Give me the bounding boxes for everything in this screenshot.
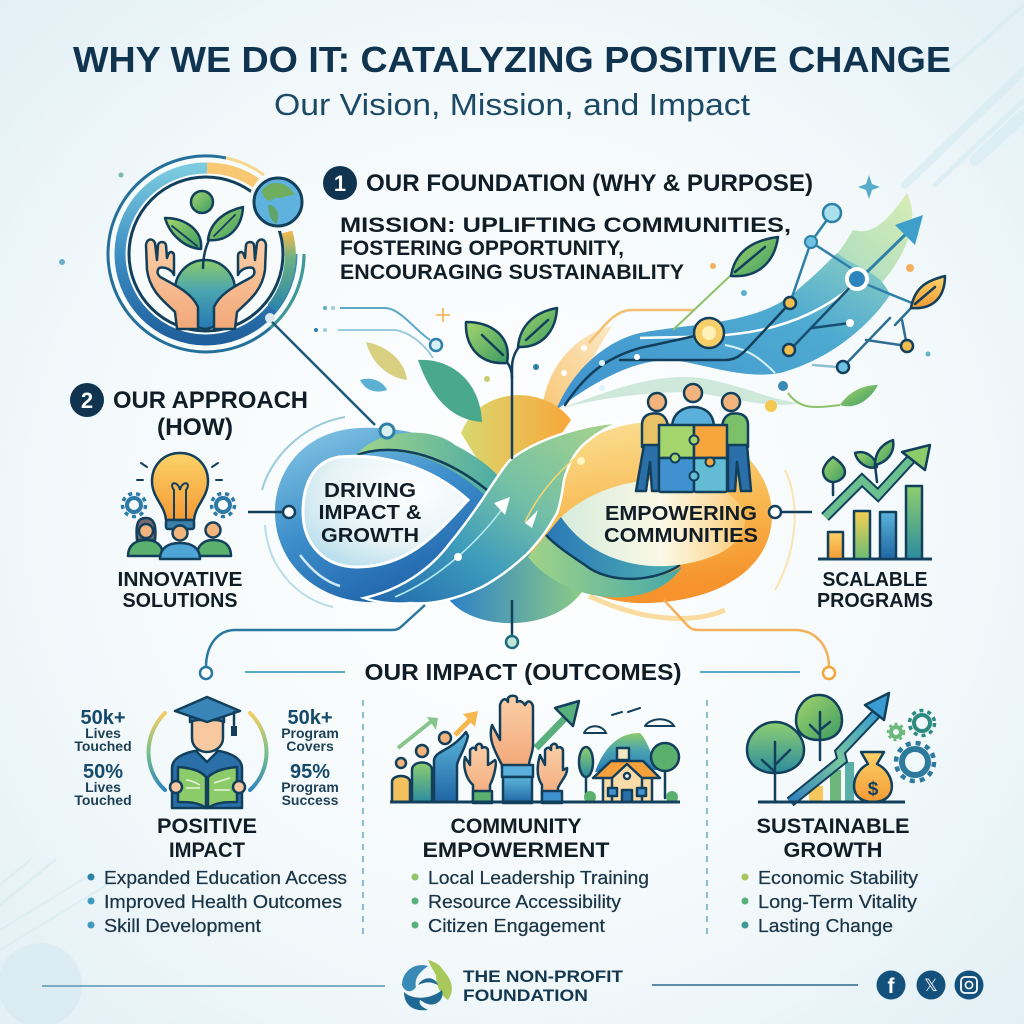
stats left	[74, 707, 132, 808]
badge: 1	[323, 166, 357, 200]
panel: positive impact	[74, 697, 347, 936]
crossing ribbon	[364, 422, 621, 604]
icon: trees, arrow, money bag, gears: $	[868, 779, 879, 800]
label: innovative solutions	[118, 568, 242, 612]
icon: graduate reading	[170, 697, 245, 808]
social: facebook	[876, 970, 906, 1000]
arrow head	[895, 215, 923, 245]
social: x: 𝕏	[924, 976, 938, 995]
stats left: 50%	[83, 761, 123, 783]
list: sustainable growth: Economic Stability	[758, 867, 919, 888]
stats left: Lives	[85, 725, 121, 741]
left lobe	[275, 428, 530, 602]
stats right: 50k+	[287, 707, 333, 729]
label: empowering communities	[604, 502, 758, 547]
connector: infinity to impact	[511, 600, 513, 636]
stats right	[281, 707, 339, 808]
list: community empowerment: Local Leadership Training	[428, 867, 649, 888]
heading: positive impact	[157, 815, 257, 862]
icon: orange leaf	[911, 276, 945, 308]
stats right: Program	[281, 725, 339, 741]
footer brand text: THE NON-PROFIT	[463, 967, 624, 986]
label: scalable programs	[817, 568, 933, 612]
stats left: Lives	[85, 779, 121, 795]
footer brand text: FOUNDATION	[463, 986, 588, 1005]
stats left: Touched	[74, 792, 132, 808]
footer	[42, 960, 984, 1010]
badge: 2	[70, 383, 104, 417]
heading: community empowerment: EMPOWERMENT	[422, 839, 610, 862]
heading: sustainable growth: GROWTH	[784, 839, 882, 862]
heading: our approach: (HOW)	[157, 414, 233, 441]
center sun	[461, 395, 571, 480]
stats left: 50k+	[80, 707, 126, 729]
icon: trees, arrow, money bag, gears	[747, 693, 934, 802]
label: driving impact and growth	[318, 479, 422, 547]
heading: community empowerment	[422, 815, 610, 862]
heading: sustainable growth: SUSTAINABLE	[756, 815, 910, 838]
heading: sustainable growth	[756, 815, 910, 862]
icon: green leaf	[673, 237, 778, 330]
footer brand text	[463, 967, 624, 1005]
social: x	[916, 970, 946, 1000]
list: positive impact: Improved Health Outcomes	[104, 891, 342, 912]
mission text: MISSION: UPLIFTING COMMUNITIES,	[340, 213, 791, 237]
label: scalable programs: SCALABLE	[822, 568, 928, 591]
heading: our approach: OUR APPROACH	[113, 387, 308, 414]
panel: central infinity loop	[262, 308, 795, 648]
heading: our impact: OUR IMPACT (OUTCOMES)	[364, 659, 682, 685]
mission text: ENCOURAGING SUSTAINABILITY	[340, 260, 684, 284]
label: innovative solutions: INNOVATIVE	[118, 568, 242, 591]
heading: our foundation: OUR FOUNDATION (WHY & PURPOSE)	[366, 170, 813, 197]
list: sustainable growth: Lasting Change	[758, 915, 893, 936]
icon: globe	[249, 173, 307, 231]
heading: our approach	[113, 387, 308, 441]
label: driving impact and growth: GROWTH	[321, 524, 419, 547]
label: scalable programs: PROGRAMS	[817, 589, 933, 612]
social: instagram	[954, 970, 984, 1000]
icon: people holding puzzle	[636, 384, 751, 492]
panel: sustainable growth	[742, 693, 934, 936]
stats right: Program	[281, 779, 339, 795]
connector: right branch to impact	[664, 600, 835, 679]
heading: community empowerment: COMMUNITY	[450, 815, 582, 838]
social: facebook: f	[888, 975, 896, 998]
plant stem	[466, 308, 557, 458]
stats right: Covers	[286, 738, 334, 754]
badge: 2: 2	[81, 388, 93, 413]
icon: bar chart with arrow	[818, 440, 932, 559]
big glowing node	[694, 318, 724, 348]
label: innovative solutions: SOLUTIONS	[122, 589, 238, 612]
stats right: Success	[282, 792, 339, 808]
badge: 1: 1	[334, 171, 346, 196]
list: positive impact: Expanded Education Access	[104, 867, 347, 888]
subtitle: Our Vision, Mission, and Impact	[274, 87, 750, 122]
title: WHY WE DO IT: CATALYZING POSITIVE CHANGE	[73, 39, 951, 80]
icon: earth in hands	[146, 191, 266, 329]
list: positive impact	[88, 867, 347, 936]
right lobe	[500, 422, 772, 603]
stats right: 95%	[290, 761, 330, 783]
upper right flowing network graphic	[543, 175, 945, 412]
pale orange halo	[589, 596, 725, 618]
panel: community empowerment	[390, 696, 680, 936]
panel: innovative solutions	[118, 453, 295, 612]
icon: light bulb with gears and people	[122, 453, 234, 559]
label: empowering communities: COMMUNITIES	[604, 524, 758, 547]
connector: foundation to infinity	[272, 322, 375, 425]
list: community empowerment: Resource Accessibility	[428, 891, 622, 912]
label: empowering communities: EMPOWERING	[605, 502, 757, 525]
list: positive impact: Skill Development	[104, 915, 261, 936]
list: sustainable growth	[742, 867, 919, 936]
mission text: FOSTERING OPPORTUNITY,	[340, 236, 624, 260]
stats left: Touched	[74, 738, 132, 754]
label: driving impact and growth: DRIVING	[324, 479, 416, 502]
label: driving impact and growth: IMPACT &	[318, 501, 422, 524]
decorative connector lines	[314, 306, 539, 382]
heading: positive impact: POSITIVE	[157, 815, 257, 838]
panel: scalable programs	[769, 440, 933, 612]
logo	[402, 960, 452, 1010]
leaves behind	[360, 342, 482, 422]
mission text	[340, 213, 791, 284]
connector: left branch to impact	[200, 605, 425, 679]
icon: people, hands and house	[390, 696, 680, 803]
list: community empowerment: Citizen Engagement	[428, 915, 605, 936]
panel: section 1 foundation icon	[108, 156, 307, 352]
heading: positive impact: IMPACT	[169, 839, 245, 862]
brackets	[148, 713, 165, 790]
list: sustainable growth: Long-Term Vitality	[758, 891, 918, 912]
list: community empowerment	[412, 867, 649, 936]
